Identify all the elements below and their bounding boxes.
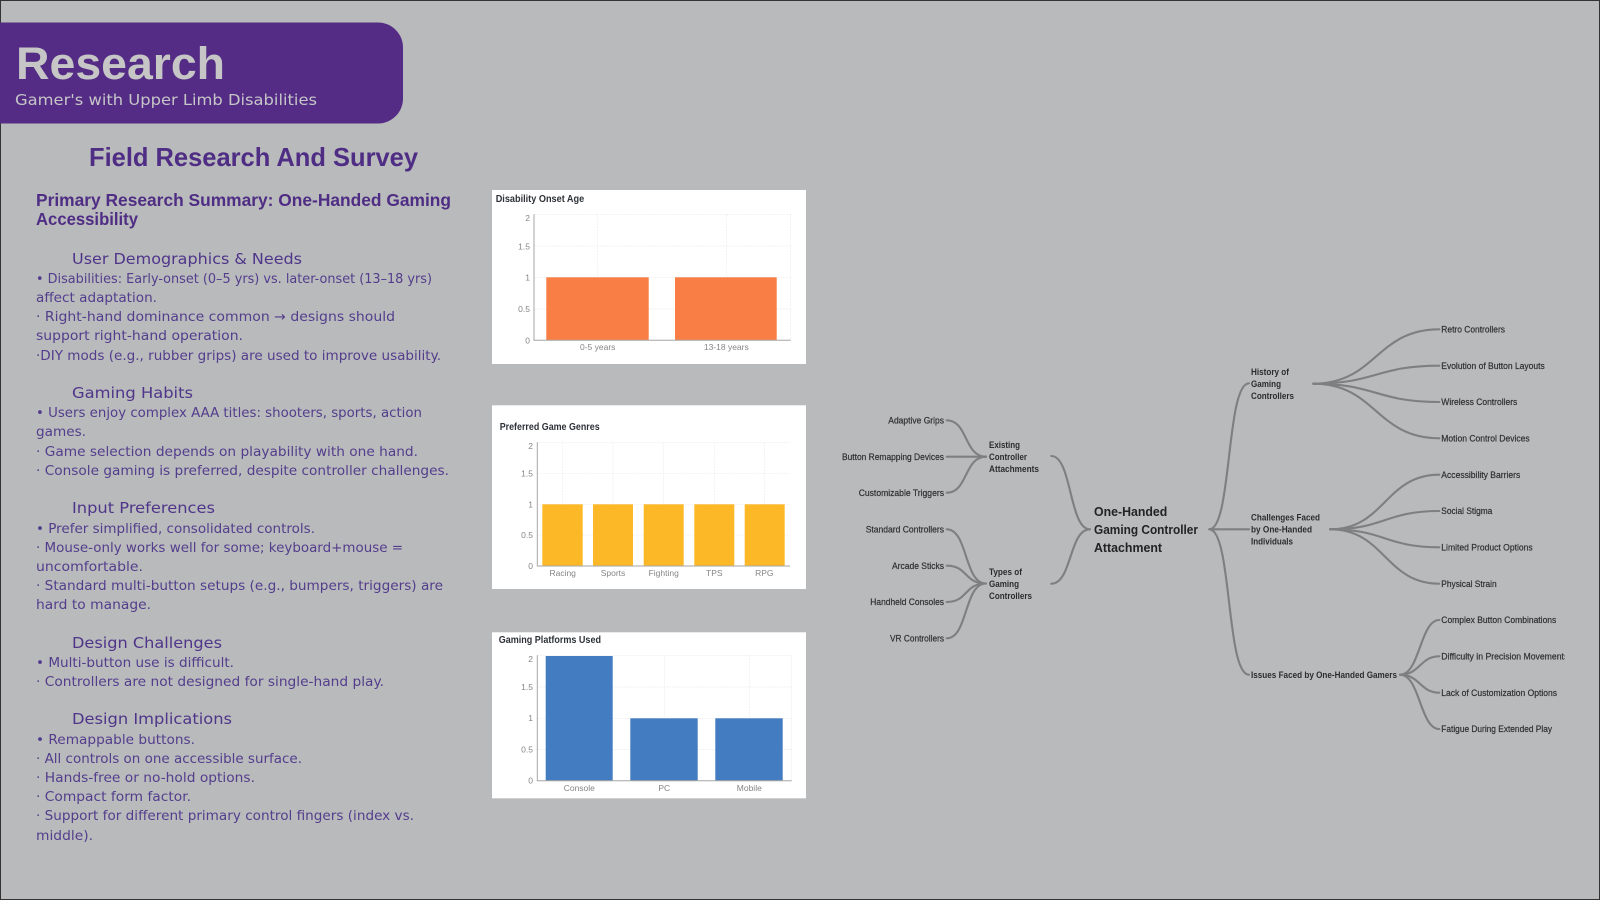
left leaf labels: Standard Controllers [866, 524, 944, 534]
topic: existing controller attachments: Controller [989, 452, 1027, 462]
topic: challenges faced [1251, 512, 1320, 546]
connectors: central node to right topics [1209, 383, 1249, 675]
right leaf labels: Limited Product Options [1441, 542, 1533, 552]
topic: types of gaming controllers [989, 567, 1032, 601]
summary heading [36, 190, 451, 229]
central node label: Attachment [1094, 540, 1163, 555]
right leaf labels: Lack of Customization Options [1441, 688, 1557, 698]
section: design challenges: • Multi-button use is difficult. [36, 655, 234, 671]
bar chart: preferred game genres: Sports [601, 568, 625, 578]
section: gaming habits [36, 384, 449, 479]
section: input preferences: · Mouse-only works well for some; keyboard+mouse = [36, 540, 403, 556]
right leaf labels [1441, 324, 1569, 734]
right leaf labels: Complex Button Combinations [1441, 615, 1557, 625]
bar chart: disability onset age: 1 [525, 272, 530, 282]
research summary text panel [36, 190, 451, 844]
left leaf labels: Arcade Sticks [892, 561, 944, 571]
bar chart: gaming platforms used: 0.5 [521, 745, 533, 755]
section: design implications: · All controls on one accessible surface. [36, 751, 302, 767]
bar chart: preferred game genres: Preferred Game Genres [500, 421, 600, 433]
connectors: right topics to leaves [1313, 329, 1439, 729]
bar chart: preferred game genres: Racing [549, 568, 576, 578]
section: design implications: Design Implications [72, 710, 232, 728]
right leaf labels: Motion Control Devices [1441, 434, 1530, 444]
section: input preferences: hard to manage. [36, 597, 151, 613]
bar chart: disability onset age: 0-5 years [580, 342, 615, 352]
left leaf labels: Button Remapping Devices [842, 452, 944, 462]
header banner [0, 22, 403, 124]
right leaf labels: Physical Strain [1441, 579, 1497, 589]
topic: challenges faced: Individuals [1251, 536, 1293, 546]
central node label [1094, 504, 1198, 555]
section: input preferences [36, 499, 443, 613]
bar chart: gaming platforms used: PC [658, 783, 670, 793]
left leaf labels: VR Controllers [890, 634, 944, 644]
topic: types of gaming controllers: Controllers [989, 591, 1032, 601]
section: design implications: middle). [36, 828, 93, 844]
left leaf labels [842, 416, 944, 644]
section: user demographics and needs: ·DIY mods (e.g., rubber grips) are used to improve usability. [36, 348, 441, 364]
bar chart: disability onset age [492, 190, 806, 364]
section: design implications: · Compact form factor. [36, 789, 191, 805]
topic: history of gaming controllers: Gaming [1251, 379, 1281, 389]
section: user demographics and needs [36, 250, 441, 364]
subtitle: Gamer's with Upper Limb Disabilities [15, 91, 317, 109]
central node label: Gaming Controller [1094, 522, 1198, 537]
section: gaming habits: games. [36, 424, 86, 440]
connectors: mid topics to central node [1051, 456, 1090, 584]
right leaf labels: Accessibility Barriers [1441, 470, 1521, 480]
section: user demographics and needs: support right-hand operation. [36, 328, 243, 344]
bar chart: disability onset age: 2 [525, 213, 530, 223]
bar chart: gaming platforms used: Gaming Platforms Used [499, 634, 601, 646]
bar chart: gaming platforms used: Mobile [737, 783, 762, 793]
section: gaming habits: • Users enjoy complex AAA titles: shooters, sports, action [36, 405, 422, 421]
section: gaming habits: Gaming Habits [72, 384, 193, 402]
section: input preferences: uncomfortable. [36, 559, 143, 575]
bar chart: preferred game genres: 2 [528, 441, 533, 451]
topic: types of gaming controllers: Types of [989, 567, 1023, 577]
section: gaming habits: · Game selection depends on playability with one hand. [36, 444, 418, 460]
topic: existing controller attachments: Existing [989, 440, 1020, 450]
section: input preferences: · Standard multi-button setups (e.g., bumpers, triggers) are [36, 578, 443, 594]
bar chart: preferred game genres: TPS [706, 568, 723, 578]
topic: history of gaming controllers: Controllers [1251, 391, 1294, 401]
section: design implications: · Support for different primary control fingers (index vs. [36, 808, 414, 824]
right leaf labels: Retro Controllers [1441, 324, 1505, 334]
right leaf labels: Social Stigma [1441, 506, 1492, 516]
bar chart: gaming platforms used: 1.5 [521, 682, 533, 692]
bar chart: preferred game genres: 0 [528, 561, 533, 571]
topic: history of gaming controllers [1251, 367, 1294, 401]
left leaf labels: Adaptive Grips [888, 416, 944, 426]
bar chart: gaming platforms used [492, 632, 806, 798]
summary heading: Accessibility [36, 209, 138, 229]
connectors: left leaves to mid topics [947, 420, 986, 638]
right leaf labels: Wireless Controllers [1441, 397, 1518, 407]
section: user demographics and needs: · Right-hand dominance common → designs should [36, 309, 395, 325]
topic: challenges faced: Challenges Faced [1251, 512, 1320, 522]
bar chart: preferred game genres: Fighting [649, 568, 679, 578]
section: design challenges [36, 634, 384, 690]
bar chart: disability onset age: 0.5 [518, 304, 530, 314]
section: gaming habits: · Console gaming is preferred, despite controller challenges. [36, 463, 449, 479]
bar chart: gaming platforms used: 1 [528, 713, 533, 723]
section: design implications: · Hands-free or no-hold options. [36, 770, 255, 786]
bar chart: disability onset age: Disability Onset Age [496, 193, 584, 205]
left leaf labels: Customizable Triggers [859, 488, 944, 498]
bar chart: disability onset age: 13-18 years [704, 342, 749, 352]
section: input preferences: • Prefer simplified, consolidated controls. [36, 521, 315, 537]
section: user demographics and needs: affect adaptation. [36, 290, 157, 306]
section: input preferences: Input Preferences [72, 499, 215, 517]
right leaf labels: Fatigue During Extended Play [1441, 724, 1552, 734]
left leaf labels: Handheld Consoles [870, 597, 944, 607]
bar chart: disability onset age: 1.5 [518, 242, 530, 252]
mind map [842, 324, 1569, 734]
section: design challenges: · Controllers are not designed for single-hand play. [36, 674, 384, 690]
bar chart: gaming platforms used: Console [564, 783, 595, 793]
topic: challenges faced: by One-Handed [1251, 524, 1312, 534]
section: user demographics and needs: • Disabilities: Early-onset (0–5 yrs) vs. later-onset (13–18 yrs) [36, 271, 432, 287]
section: design implications: • Remappable buttons. [36, 732, 195, 748]
right leaf labels: Difficulty in Precision Movements [1441, 652, 1569, 662]
bar chart: gaming platforms used: 2 [528, 654, 533, 664]
bar chart: preferred game genres: 0.5 [521, 530, 533, 540]
topic: existing controller attachments: Attachments [989, 464, 1039, 474]
right leaf labels: Evolution of Button Layouts [1441, 361, 1545, 371]
topic: existing controller attachments [989, 440, 1039, 474]
section: user demographics and needs: User Demographics & Needs [72, 250, 302, 268]
bar chart: preferred game genres: 1.5 [521, 468, 533, 478]
topic: types of gaming controllers: Gaming [989, 579, 1019, 589]
bar chart: preferred game genres: RPG [755, 568, 774, 578]
bar chart: gaming platforms used: 0 [528, 776, 533, 786]
bar chart: preferred game genres [492, 405, 806, 589]
summary heading: Primary Research Summary: One-Handed Gaming [36, 190, 451, 210]
bar chart: preferred game genres: 1 [528, 500, 533, 510]
title: Research [16, 38, 225, 89]
central node label: One-Handed [1094, 504, 1167, 519]
section: design implications [36, 710, 414, 844]
topic: issues faced: Issues Faced by One-Handed Gamers [1251, 670, 1397, 680]
section heading: Field Research And Survey [89, 142, 419, 172]
bar chart: disability onset age: 0 [525, 336, 530, 346]
section: design challenges: Design Challenges [72, 634, 222, 652]
topic: history of gaming controllers: History of [1251, 367, 1290, 377]
